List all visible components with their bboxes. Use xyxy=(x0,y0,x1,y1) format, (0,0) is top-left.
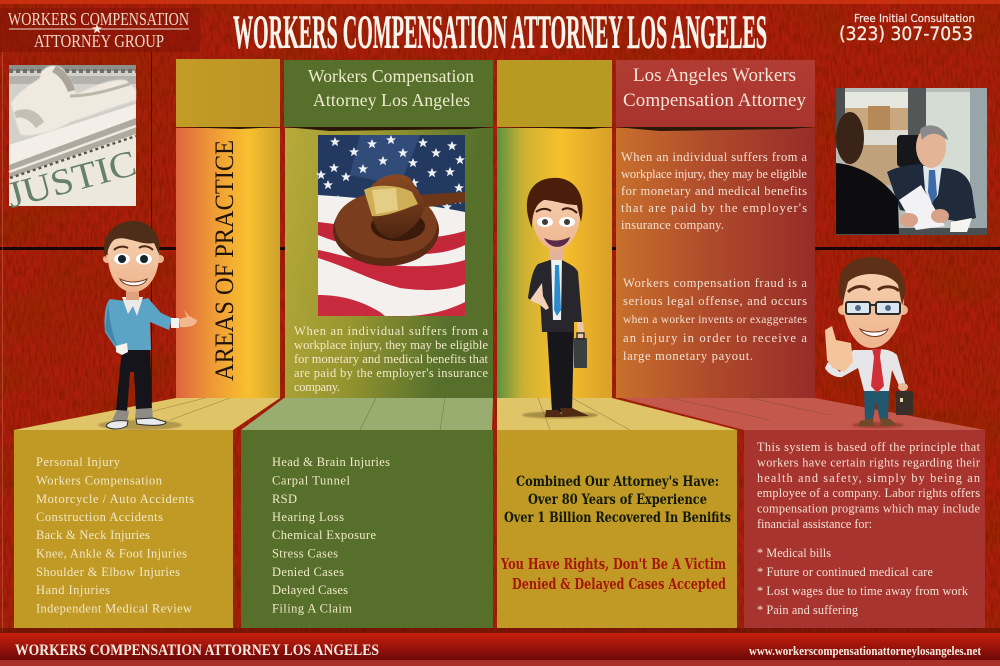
phone block: free consultation: (323) 307-7053 xyxy=(839,24,973,45)
phone block: free consultation xyxy=(839,13,975,45)
panel: practice list, gold: Knee, Ankle & Foot Injuries xyxy=(36,546,187,560)
panel: experience callout, gold: Combined Our Attorney's Have: xyxy=(516,474,719,490)
floor: gold platform top xyxy=(14,398,280,430)
panel: experience callout, gold: You Have Rights, Don't Be A Victim xyxy=(500,555,726,573)
panel: practice list, green: Head & Brain Injuries xyxy=(272,455,390,469)
panel: red heading xyxy=(616,60,815,127)
panel: red heading: Compensation Attorney xyxy=(623,90,806,111)
panel: red column with text: large monetary payout. xyxy=(623,349,753,363)
panel: practice list, gold: Construction Accidents xyxy=(36,510,163,524)
floor: red platform top xyxy=(621,398,985,430)
panel: gold top box 2 xyxy=(497,60,612,127)
panel: gold top box 1 xyxy=(176,59,280,127)
panel: practice list, green: Stress Cases xyxy=(272,546,338,560)
panel: red column with text: Workers compensation fraud is a xyxy=(623,276,807,290)
panel: green heading: Workers Compensation xyxy=(308,66,474,86)
character: man in blue sweater xyxy=(98,221,197,430)
phone block: free consultation: Free Initial Consultation xyxy=(854,13,975,25)
panel: practice list, gold: Personal Injury xyxy=(36,455,121,469)
photo: American flag and gavel xyxy=(316,135,465,316)
panel: practice list, gold xyxy=(14,430,233,628)
panel: practice list, green: Carpal Tunnel xyxy=(272,474,351,488)
panel: practice list, green: RSD xyxy=(272,492,297,506)
character: man in black suit with briefcase xyxy=(522,178,598,418)
panel: green column with text: When an individual suffers from a xyxy=(294,324,488,338)
panel: red column with text: When an individual suffers from a xyxy=(621,150,807,164)
panel: practice list, green: Delayed Cases xyxy=(272,583,348,597)
panel: experience callout, gold: Over 80 Years of Experience xyxy=(528,492,707,508)
footer band: WORKERS COMPENSATION ATTORNEY LOS ANGELES xyxy=(15,642,379,659)
photo: attorney meeting in office xyxy=(836,88,987,235)
panel: red column with text: workplace injury, they may be eligible xyxy=(621,167,807,181)
panel: practice list, gold: Motorcycle / Auto Accidents xyxy=(36,492,194,506)
panel: red column with text: insurance company. xyxy=(621,218,724,232)
panel: green column with text: are paid by the employer's insurance xyxy=(294,366,488,380)
panel: gold gradient column xyxy=(497,128,612,398)
panel: red column with text: serious legal offense, and occurs xyxy=(623,294,807,308)
panel: experience callout, gold xyxy=(497,430,737,628)
panel: practice list, gold: Shoulder & Elbow Injuries xyxy=(36,565,180,579)
panel: experience callout, gold: Over 1 Billion Recovered In Benifits xyxy=(504,510,731,526)
floor: green platform top xyxy=(241,398,493,430)
panel: green heading: Attorney Los Angeles xyxy=(313,90,470,110)
shadows under heading boxes xyxy=(176,127,815,131)
panel: red column with text: when a worker invents or exaggerates xyxy=(623,314,808,326)
logo: Workers Compensation Attorney Group xyxy=(0,8,200,52)
panel: green column with text: company. xyxy=(294,380,340,394)
panel: experience callout, gold: Denied & Delayed Cases Accepted xyxy=(512,575,726,593)
panel: green column with text: workplace injury, they may be eligible xyxy=(294,338,488,352)
panel: rights text, red: health and safety, simply by being an xyxy=(757,471,980,485)
panel: rights text, red: workers have certain rights regarding their xyxy=(757,456,980,470)
footer band xyxy=(0,633,1000,666)
panel: rights text, red: * Pain and suffering xyxy=(757,603,858,617)
character: man with glasses and thumbs up xyxy=(825,257,913,428)
panel: practice list, gold: Back & Neck Injuries xyxy=(36,528,150,542)
panel: practice list, gold: Workers Compensation xyxy=(36,474,163,488)
panel: red column with text xyxy=(616,128,815,398)
panel: green heading xyxy=(284,60,493,127)
panel: practice list, green: Denied Cases xyxy=(272,565,344,579)
panel: green column with text xyxy=(285,128,493,398)
panel: rights text, red: This system is based off the principle that xyxy=(757,440,981,454)
panel: practice list, green xyxy=(241,430,493,628)
panel: rights text, red: * Lost wages due to time away from work xyxy=(757,584,969,598)
panel: practice list, green: Filing A Claim xyxy=(272,602,352,616)
panel: practice list, gold: Hand Injuries xyxy=(36,583,110,597)
panel: practice list, green: Hearing Loss xyxy=(272,510,344,524)
panel: red column with text: for monetary and medical benefits xyxy=(621,184,807,198)
panel: red column with text: an injury in order to receive a xyxy=(623,331,807,345)
panel: rights text, red: compensation programs which may include xyxy=(757,502,981,516)
panel: rights text, red: * Future or continued medical care xyxy=(757,565,934,579)
panel: rights text, red xyxy=(744,430,985,628)
floor: centre platform top xyxy=(497,398,737,430)
panel: practice list, green: Chemical Exposure xyxy=(272,528,376,542)
logo: Workers Compensation Attorney Group: ATTORNEY GROUP xyxy=(34,31,164,51)
panel: rights text, red: employee of a company. Labor rights offers xyxy=(757,486,980,500)
panel: rights text, red: financial assistance for: xyxy=(757,517,872,531)
photo: justice building sculpture: JUSTIC xyxy=(3,143,141,217)
photo: justice building sculpture xyxy=(3,65,141,217)
panel: practice list, gold: Independent Medical Review xyxy=(36,602,192,616)
panel: areas of practice column xyxy=(176,128,280,398)
logo: Workers Compensation Attorney Group: WORKERS COMPENSATION xyxy=(8,9,189,29)
panel: green column with text: for monetary and medical benefits that xyxy=(294,352,489,366)
panel: areas of practice column: AREAS OF PRACTICE xyxy=(210,140,239,381)
panel: red column with text: that are paid by the employer's xyxy=(621,201,807,215)
panel: red heading: Los Angeles Workers xyxy=(633,65,796,86)
panel: rights text, red: * Medical bills xyxy=(757,546,831,560)
